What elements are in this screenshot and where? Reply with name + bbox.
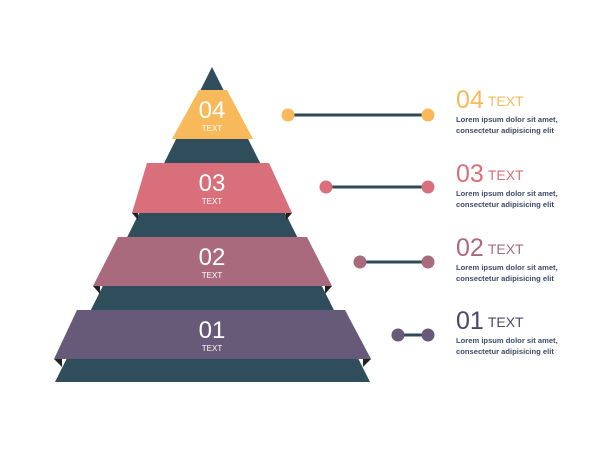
text block 03: TEXT (488, 167, 524, 183)
band 02 (93, 237, 332, 294)
connector 01 (392, 328, 434, 342)
band 04: TEXT (202, 124, 222, 133)
connector 04 (282, 108, 434, 122)
band 02: 02 (199, 244, 225, 271)
text block 01: TEXT (488, 314, 524, 330)
connector 02 (354, 256, 434, 268)
text block 02: TEXT (488, 241, 524, 257)
text block 04: TEXT (488, 93, 524, 109)
text block 04: consectetur adipisicing elit (456, 126, 554, 135)
band 02: TEXT (202, 271, 222, 280)
pyramid base triangle (55, 67, 370, 382)
band 01: 01 (199, 317, 225, 344)
text block 03: 03 (456, 160, 484, 188)
text block 01: Lorem ipsum dolor sit amet, (456, 336, 558, 345)
band 03 (132, 163, 292, 220)
band 01: TEXT (202, 344, 222, 353)
band 01 (54, 310, 371, 367)
text block 01: 01 (456, 307, 484, 335)
text block 04 (456, 86, 558, 135)
text block 01: consectetur adipisicing elit (456, 347, 554, 356)
text block 02: 02 (456, 234, 484, 262)
text block 04: Lorem ipsum dolor sit amet, (456, 115, 558, 124)
text block 01 (456, 307, 558, 356)
connector 03 (320, 180, 434, 194)
text block 02 (456, 234, 558, 283)
text block 03: Lorem ipsum dolor sit amet, (456, 189, 558, 198)
text block 04: 04 (456, 86, 484, 114)
text block 03: consectetur adipisicing elit (456, 200, 554, 209)
text block 02: Lorem ipsum dolor sit amet, (456, 263, 558, 272)
text block 02: consectetur adipisicing elit (456, 274, 554, 283)
text block 03 (456, 160, 558, 209)
band 03: 03 (199, 170, 225, 197)
band 04: 04 (199, 97, 225, 124)
band 03: TEXT (202, 197, 222, 206)
band 04 (172, 90, 253, 139)
